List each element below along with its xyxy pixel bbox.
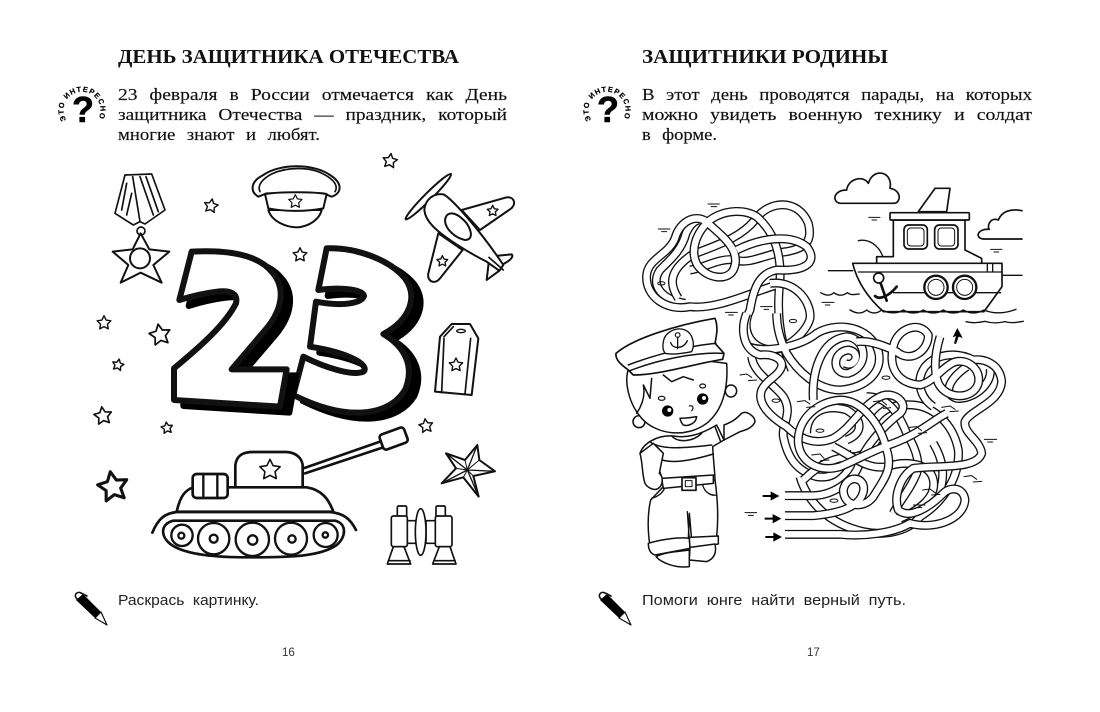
text block: right intro: в форме. (642, 125, 717, 144)
illustration: coloring page with number 23 (93, 153, 514, 564)
icon: interesting fact, left: ЭТО ИНТЕРЕСНО (58, 86, 106, 122)
text block: left intro: многие знают и любят. (118, 125, 320, 144)
number 23 (174, 248, 421, 419)
medal (113, 174, 169, 283)
text block: left intro (118, 85, 508, 144)
scattered stars (93, 153, 434, 502)
instruction: left: Раскрась картинку. (118, 592, 259, 609)
icon: interesting fact, right: ? (597, 89, 619, 130)
page number 16: 16 (282, 647, 295, 659)
text block: left intro: 23 февраля в России отмечается как День (118, 85, 508, 104)
pencil icon, left (75, 592, 107, 625)
text block: left intro: защитника Отечества — праздник, который (118, 105, 507, 124)
shoulder board (435, 324, 478, 395)
text block: right intro (642, 85, 1033, 144)
text block: right intro: В этот день проводятся парады, на которых (642, 85, 1033, 104)
head (633, 416, 645, 428)
airplane (403, 171, 514, 282)
title: right page: ЗАЩИТНИКИ РОДИНЫ (642, 46, 888, 68)
maze: lower knot (740, 313, 1002, 535)
tank (152, 427, 409, 557)
torso with stripes (640, 425, 724, 487)
illustration: ship and clouds (658, 173, 1023, 323)
belt and arm (662, 475, 713, 488)
military cap (253, 166, 340, 227)
character: young sailor (616, 318, 755, 567)
text block: right intro: можно увидеть военную технику и солдат (642, 105, 1032, 124)
maze: upper knot (647, 205, 811, 370)
binoculars (387, 506, 456, 564)
sailor cap (616, 318, 724, 375)
maze arrows: entrances and exit (763, 328, 963, 542)
3D star (442, 445, 495, 497)
icon: interesting fact, right: ЭТО ИНТЕРЕСНО (583, 86, 631, 122)
legs and trousers (648, 480, 718, 545)
instruction: right: Помоги юнге найти верный путь. (642, 592, 906, 609)
title: left page: ДЕНЬ ЗАЩИТНИКА ОТЕЧЕСТВА (118, 46, 459, 68)
pencil icon, right (599, 592, 631, 625)
icon: interesting fact, left: ? (72, 89, 94, 130)
page number 17: 17 (807, 647, 820, 659)
